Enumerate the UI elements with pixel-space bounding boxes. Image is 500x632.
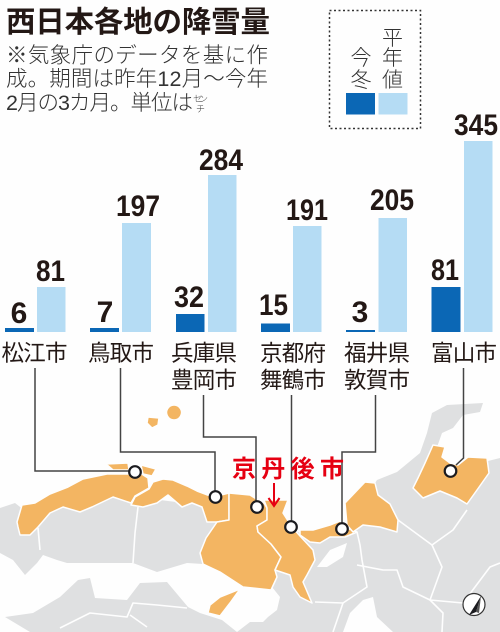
Toyama (413, 445, 489, 504)
legend: this winter (346, 47, 375, 114)
city labels: 敦賀市 (344, 368, 410, 393)
Kyoto (257, 500, 315, 603)
Oki and peninsula pieces (106, 405, 182, 476)
bars: Toyooka (174, 144, 243, 332)
city labels: 松江市 (2, 341, 68, 366)
map: prefecture borders (38, 507, 500, 632)
legend: normal: 平 (382, 27, 403, 50)
Shimane (17, 473, 149, 535)
bars: Matsue: 6 (11, 297, 27, 330)
Fukui west (300, 521, 357, 543)
legend (330, 10, 420, 128)
Hyogo (200, 493, 281, 590)
note text: セン (193, 94, 208, 104)
legend: this winter: 冬 (350, 69, 372, 92)
note text: チ (196, 104, 205, 114)
bars: Toyooka: 284 (199, 144, 243, 177)
bars: Toyooka: 32 (174, 281, 204, 314)
legend: normal: 値 (382, 69, 403, 92)
note text: ※気象庁のデータを基に作 (6, 44, 268, 68)
leader lines (35, 368, 464, 529)
bars: Maizuru: 191 (286, 194, 328, 227)
map: highlighted prefectures (17, 405, 489, 616)
note text (6, 44, 268, 115)
Tottori (131, 479, 229, 522)
bars: Maizuru: 15 (259, 289, 288, 322)
city labels: 鳥取市 (88, 341, 154, 366)
bars: Tsuruga (346, 184, 414, 332)
legend: normal (378, 27, 408, 114)
map: lake and bays (317, 543, 393, 632)
city labels: 京都府 (260, 341, 326, 366)
Awaji island (208, 589, 240, 616)
bars: Tottori: 7 (97, 296, 113, 329)
bars: Toyama (431, 109, 498, 332)
city labels: 舞鶴市 (260, 368, 326, 393)
bars: Toyama: 81 (431, 254, 459, 287)
note text: 2月の3カ月。単位は (6, 91, 193, 115)
bars: Matsue: 81 (36, 255, 65, 288)
map: gray surrounding land (0, 403, 500, 632)
arrow (268, 483, 280, 506)
city labels: 福井県 (344, 341, 410, 366)
legend: this winter: 今 (350, 47, 372, 70)
city labels: 豊岡市 (171, 368, 237, 393)
bars: Matsue (5, 255, 66, 332)
city labels: 兵庫県 (171, 341, 237, 366)
bars: Tsuruga: 3 (352, 296, 368, 329)
bars: Maizuru (259, 194, 328, 332)
map (0, 403, 500, 632)
location markers (129, 465, 456, 535)
bars: Tottori (90, 190, 160, 332)
callout: Kyotango city: 京丹後市 (232, 456, 344, 483)
city labels (2, 341, 497, 393)
legend: normal: 年 (382, 47, 403, 70)
Fukui east (345, 482, 398, 532)
note text: 成。期間は昨年12月～今年 (6, 67, 268, 91)
bars: Tottori: 197 (116, 190, 160, 223)
city labels: 富山市 (431, 341, 497, 366)
bars: Tsuruga: 205 (370, 184, 414, 217)
title: 西日本各地の降雪量 (6, 6, 270, 39)
callout: Kyotango city (232, 456, 344, 506)
icon: north compass (463, 594, 485, 616)
